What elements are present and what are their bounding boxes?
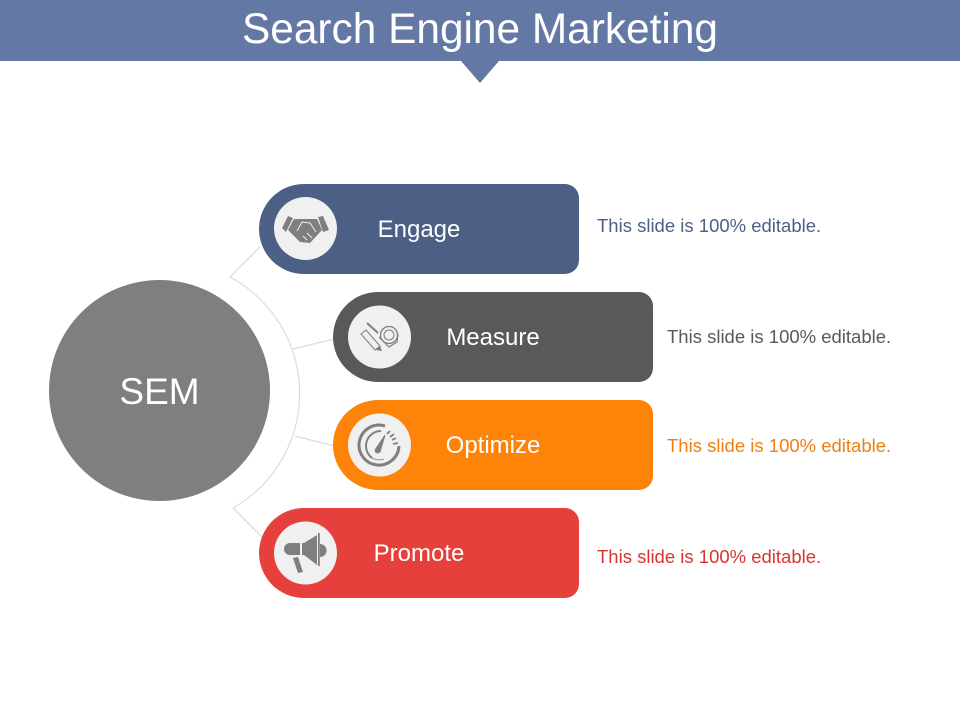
text: Optimize description: This slide is 100% editable. (667, 435, 891, 456)
panel: Optimize: Optimize (446, 432, 540, 459)
SEM circle (49, 280, 270, 501)
title banner (0, 0, 960, 83)
text: Engage description: This slide is 100% editable. (597, 215, 821, 236)
connector arc and lines (230, 247, 334, 537)
icon: pencil and tape measure (361, 323, 398, 351)
SEM circle: SEM (119, 371, 200, 412)
panel: Measure (333, 292, 653, 382)
panel: Engage (259, 184, 579, 274)
panel: Measure: Measure (446, 324, 540, 351)
title: Search Engine Marketing (242, 5, 718, 52)
panel: Promote (259, 508, 579, 598)
icon: speedometer gauge (359, 425, 399, 465)
panel: Promote: Promote (374, 540, 464, 567)
panel: Engage: Engage (378, 216, 460, 243)
panel: Optimize (333, 400, 653, 490)
text: Measure description: This slide is 100% editable. (667, 326, 891, 347)
text: Promote description: This slide is 100% editable. (597, 546, 821, 567)
icon: handshake (282, 216, 329, 243)
icon: megaphone (284, 533, 326, 573)
